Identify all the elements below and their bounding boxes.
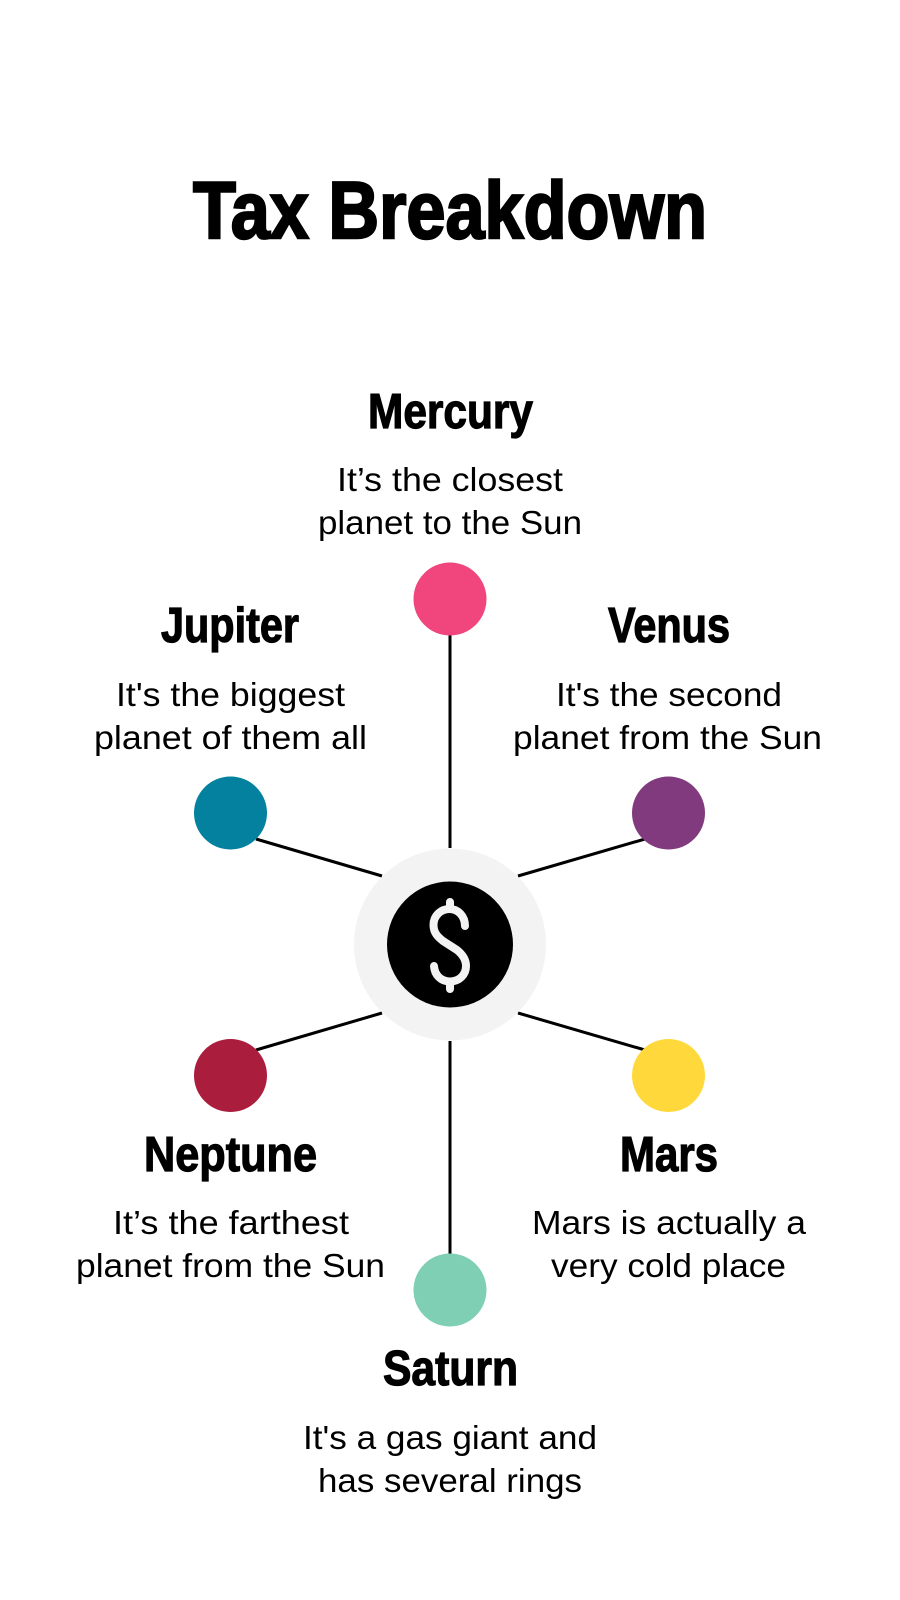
title: Tax Breakdown <box>193 166 707 256</box>
text: Saturn description: has several rings <box>318 1462 582 1499</box>
panel: Saturn <box>303 1254 597 1499</box>
connector: Mars <box>518 1013 645 1050</box>
marker: Jupiter <box>194 776 267 850</box>
text: Neptune description <box>76 1204 385 1284</box>
heading: Neptune: Neptune <box>144 1128 317 1182</box>
heading: Mercury: Mercury <box>368 385 533 439</box>
text: Mars description <box>532 1204 807 1284</box>
panel: Neptune <box>76 1039 385 1284</box>
connector: Jupiter <box>256 839 382 876</box>
marker: Saturn <box>414 1254 486 1326</box>
text: Mercury description <box>318 461 582 541</box>
text: Jupiter description: planet of them all <box>94 719 367 756</box>
text: Venus description: planet from the Sun <box>513 719 822 756</box>
text: Saturn description: It's a gas giant and <box>303 1419 597 1456</box>
marker: Venus <box>632 776 705 850</box>
connector: Mercury <box>448 635 452 848</box>
text: Neptune description: It’s the farthest <box>113 1204 349 1241</box>
connector: Saturn <box>448 1041 452 1255</box>
text: Mercury description: planet to the Sun <box>318 504 582 541</box>
text: Venus description: It's the second <box>556 676 782 713</box>
connector: Neptune <box>256 1013 382 1050</box>
text: Jupiter description <box>94 676 367 756</box>
heading: Saturn: Saturn <box>383 1342 518 1396</box>
text: Venus description <box>513 676 822 756</box>
heading: Jupiter: Jupiter <box>161 599 299 653</box>
text: Mars description: Mars is actually a <box>532 1204 807 1241</box>
text: Neptune description: planet from the Sun <box>76 1247 385 1284</box>
heading: Venus: Venus <box>608 599 730 653</box>
marker: Neptune <box>194 1039 267 1112</box>
panel: Mars <box>532 1039 807 1284</box>
panel: Venus <box>513 599 822 850</box>
text: Jupiter description: It's the biggest <box>116 676 345 713</box>
marker: Mercury <box>414 562 486 636</box>
connector: Venus <box>518 839 645 876</box>
panel: Mercury <box>318 385 582 636</box>
heading: Mars: Mars <box>620 1128 718 1182</box>
text: Mars description: very cold place <box>551 1247 786 1284</box>
text: Mercury description: It’s the closest <box>337 461 563 498</box>
icon: central dollar hub <box>354 848 546 1040</box>
marker: Mars <box>632 1039 705 1112</box>
panel: Jupiter <box>94 599 367 850</box>
text: Saturn description <box>303 1419 597 1499</box>
